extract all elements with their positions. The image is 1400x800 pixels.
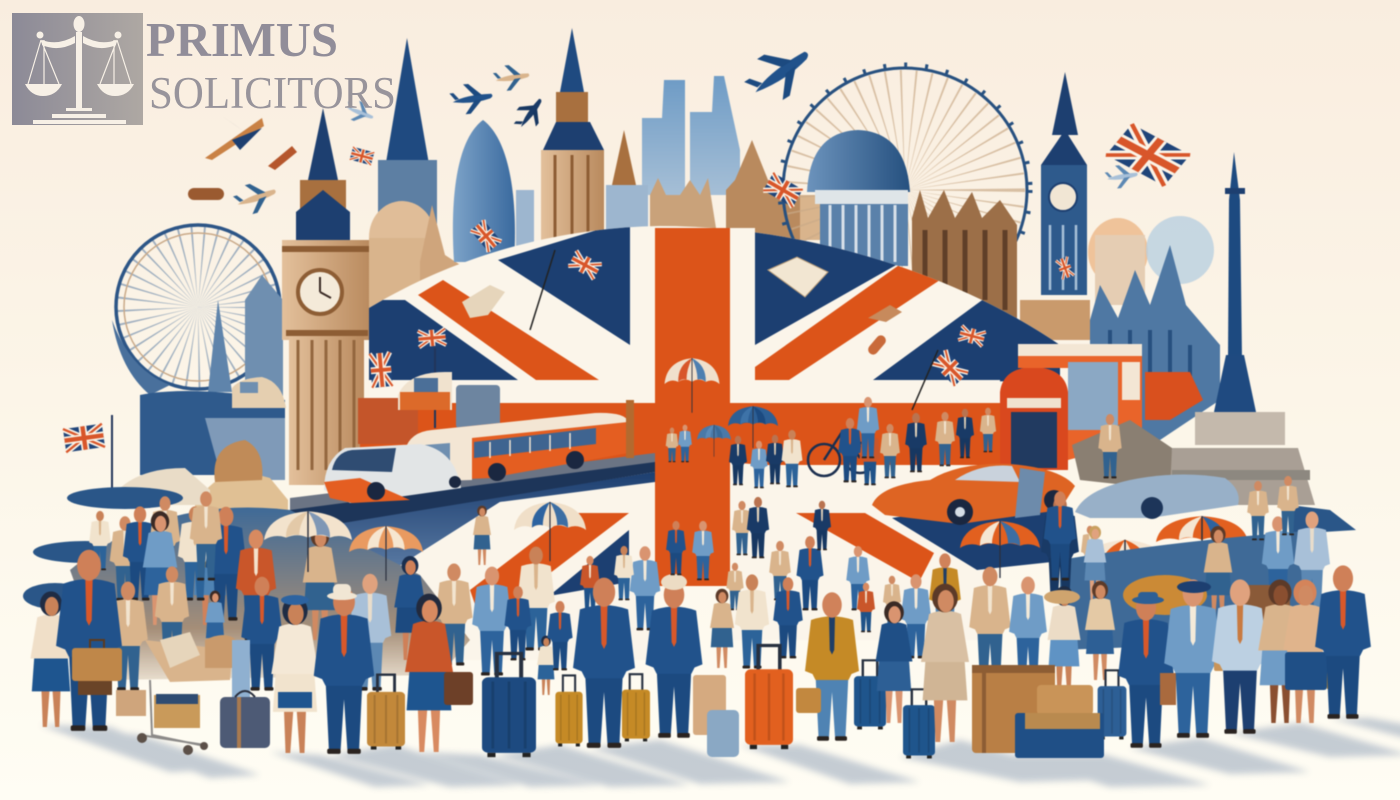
wing left mid [33,541,137,563]
harbour base buildings [140,391,285,475]
clock tower left [282,108,371,485]
man in beige coat [969,567,1011,681]
flag: left pole [63,424,105,452]
tan suitcase [367,675,405,750]
street figure [880,424,900,478]
small figure [462,285,505,318]
navy bag [1285,652,1334,690]
dress hem [278,692,312,708]
tan dome left [369,201,465,308]
monument column [1165,152,1315,505]
skyline: left side [112,38,534,485]
plane: tan [231,178,280,218]
clock face [298,270,342,314]
flag: mid right [763,173,803,207]
street crowd small [666,397,1122,488]
vehicles left [118,372,634,510]
scale strings [28,40,131,84]
scales icon [25,16,134,124]
blue parliament right [1090,245,1220,440]
left crowd backdrop [70,508,470,680]
white van [232,377,286,408]
navy suitcase [482,653,536,757]
grey box [456,385,500,429]
plane: blue [449,82,494,115]
navy wings behind crowds [23,487,1356,609]
silver car [1075,474,1239,519]
bollard lamp [626,400,634,458]
wing right [1290,505,1356,534]
umbrella navy [728,406,778,448]
open book [768,257,828,297]
right ferris wheel [780,65,1030,315]
umbrella cream [264,511,352,572]
navy trunk [1015,713,1104,758]
lower left navy [549,530,629,596]
man in navy far right [1315,565,1371,719]
hat navy [1132,592,1164,604]
brick building [358,398,418,444]
spire navy [378,38,437,210]
street figure [666,428,678,462]
flag with pole left [418,329,446,347]
sports car [872,464,1075,525]
orange van [398,372,452,410]
rocks [1072,420,1172,490]
woman hat [281,595,309,605]
grey suitcase [220,691,270,748]
bicycle [808,432,875,476]
plane: orange [205,118,264,160]
street figure [729,436,747,485]
pole [912,350,938,410]
small tan spires [606,185,648,230]
left ferris wheel [112,225,280,395]
debris [268,146,297,170]
shadows on the ground [40,718,1400,787]
lower flag and road [290,453,1070,660]
crowd left [30,491,702,757]
tan handbag [796,688,821,713]
woman in cream sweater [1048,586,1080,695]
straw hat woman [1044,590,1080,604]
street figure [980,408,996,452]
skyline: right side [780,65,1315,505]
flag small right [958,326,986,346]
man in light blue jacket [1164,579,1222,738]
woman beige jacket [155,566,189,660]
street figure [750,441,768,488]
flag on dome left [568,251,602,279]
logo [12,12,396,125]
man in blue suit with hat [314,588,374,754]
pale cloud and wheel [1088,218,1148,286]
woman in navy skirt [30,591,72,727]
plane: navy small [509,92,551,136]
orange diagonals [418,263,943,380]
tan box [1214,648,1242,671]
red bus [405,413,628,482]
umbrellas in crowd [264,502,1248,612]
dark hat [1177,581,1211,593]
mustard suitcase [622,674,650,741]
company descriptor: SOLICITORS [149,68,396,118]
back row [1044,491,1076,580]
navy under road [320,472,655,570]
street figure [860,428,880,485]
pale cylinder case [707,710,739,757]
plane: navy tail [222,116,262,150]
Union Jack dome [360,225,1061,471]
white vertical [630,228,755,403]
street figure [1098,414,1122,478]
blue skyscrapers [642,76,740,195]
wing left low [23,583,87,609]
flag: small [350,147,374,165]
street figure [857,397,879,458]
man in mustard jacket [805,592,859,741]
woman in orange jacket [405,594,453,752]
lower left orange [470,513,629,625]
skyline: centre [541,28,830,242]
woman in cream dress [271,597,319,753]
back row [89,511,111,570]
plane: large navy top [737,35,821,112]
man in long pale coat [1212,579,1268,734]
lion statue [214,440,262,482]
crowd right [972,476,1371,758]
lower right orange [796,513,934,582]
brown bag [444,672,473,705]
mustard suitcase [555,675,583,746]
lower right navy [892,490,1070,570]
road [290,453,655,525]
child blue [205,591,225,655]
lower right white [730,462,1000,640]
woman with hair [1283,579,1327,723]
wing left top [67,487,183,509]
navy case front [903,689,935,758]
navy quadrants [360,220,1060,382]
orange suitcase [745,645,793,749]
woman blue top [876,601,912,723]
tall man in suit [573,578,635,748]
umbrella orange navy centre right [960,521,1040,578]
umbrella orange cream [349,526,423,581]
straw hat [327,584,357,600]
woman in tan coat [108,582,148,691]
grey blue buildings behind clock tower [245,275,283,470]
big tan trunk [972,665,1055,753]
shopping cart [116,632,250,755]
pole [530,250,555,330]
lower left white [360,482,655,660]
double decker bus [1018,344,1142,460]
flag: tower side [1056,257,1074,279]
umbrella large right [1077,540,1173,612]
gothic church base [378,160,437,240]
small plane right [1104,164,1139,189]
street figure [956,409,974,458]
street figure [766,435,784,484]
left white car [118,468,210,505]
street figure [838,418,862,482]
small tan case [1037,685,1093,715]
parliament tan [912,190,1017,330]
sky items: planes and flags [63,35,1190,495]
tan car [195,470,288,510]
domed building [807,130,910,266]
woman in long coat [921,584,969,742]
white horizontal [369,380,1000,404]
plane: pale upper [342,97,377,128]
pole [111,415,113,495]
plane: pale [492,63,530,92]
flag: skyline [471,220,501,252]
loose figure [868,305,902,322]
street figure [782,430,802,487]
street figure [935,412,955,466]
umbrella on cross [664,358,720,413]
street figure [905,413,927,472]
flag details [369,250,986,428]
right vehicles and street scene [666,344,1239,525]
second bus [1145,372,1203,420]
orange lower vertical [655,470,730,586]
street figure [678,425,692,462]
capsule [188,188,224,200]
phone box [1000,367,1068,470]
umbrella small blue [697,425,731,457]
man in suit right [646,581,702,738]
woman cream jumper [1085,581,1115,680]
loose item [866,333,888,357]
tan briefcase [72,640,122,695]
gherkin [453,120,515,262]
flag: large top right [1106,124,1190,186]
pole [434,348,436,428]
woman in beige [1258,579,1302,723]
umbrella far right [1156,516,1248,571]
navy case [854,660,886,729]
backdrop right crowd [1060,530,1320,650]
small orange car [324,444,461,503]
company name: PRIMUS [146,12,338,67]
tan case [693,675,726,735]
navy suitcase behind [1098,670,1126,739]
orange horizontal [360,403,1000,465]
man in navy suit [56,550,122,731]
umbrella blue cream [514,502,586,561]
flag right pole [932,350,968,386]
brown bag [1160,673,1176,705]
flag side [369,352,393,388]
central tan tower [541,28,604,242]
right clock tower [1041,72,1087,295]
crowd centre [666,497,1320,758]
man in navy with hat [1118,594,1174,748]
hat [661,574,687,590]
tan hat [1123,575,1207,615]
orange vertical [655,228,730,586]
logo badge [12,13,143,125]
